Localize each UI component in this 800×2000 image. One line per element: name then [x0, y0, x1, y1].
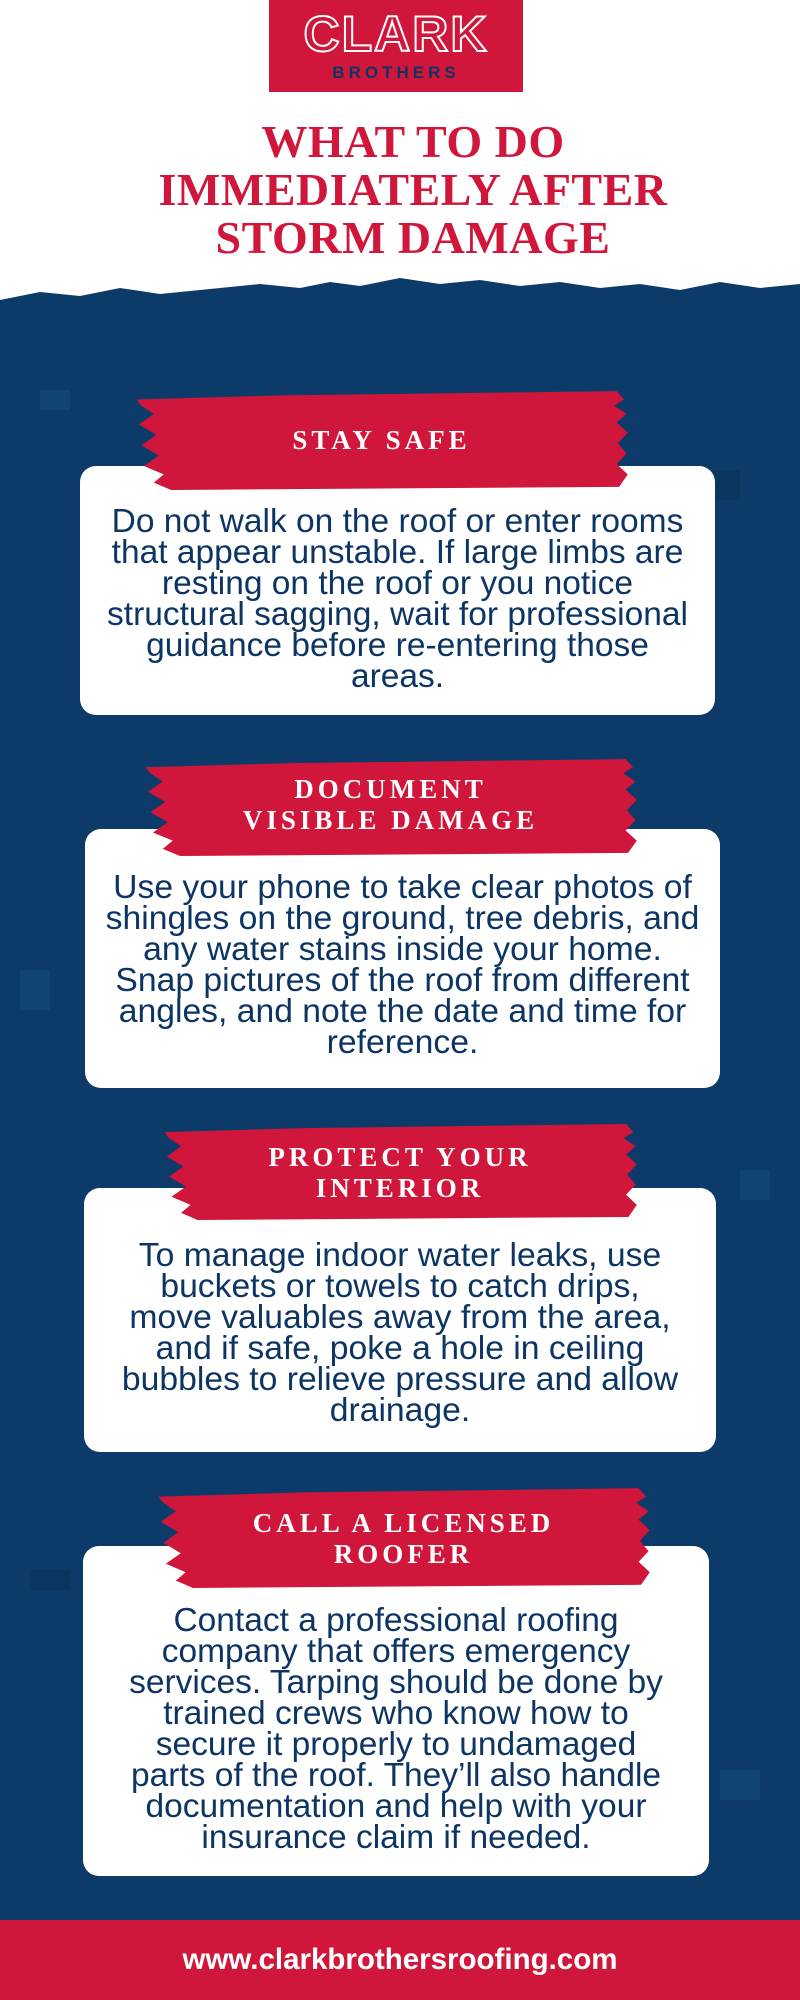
- banner heading: PROTECT YOUR: [268, 1142, 532, 1172]
- text block: move valuables away from the area,: [129, 1298, 671, 1336]
- text block: [129, 1602, 663, 1856]
- text block: shingles on the ground, tree debris, and: [106, 899, 699, 937]
- text block: angles, and note the date and time for: [119, 992, 686, 1030]
- text block: buckets or towels to catch drips,: [160, 1267, 640, 1305]
- banner heading: CALL A LICENSED: [253, 1508, 554, 1538]
- panel: protect your interior: [84, 1124, 716, 1452]
- panel: call a licensed roofer: [83, 1488, 709, 1876]
- banner heading: INTERIOR: [316, 1173, 484, 1203]
- text block: Contact a professional roofing: [173, 1602, 619, 1639]
- banner heading: ROOFER: [334, 1539, 473, 1569]
- logo: BROTHERS: [332, 63, 460, 82]
- panel: document visible damage: [85, 759, 720, 1088]
- text block: areas.: [351, 658, 444, 695]
- text block: [106, 868, 699, 1061]
- text block: Use your phone to take clear photos of: [113, 868, 692, 906]
- panel: stay safe: [80, 391, 715, 715]
- text block: services. Tarping should be done by: [129, 1664, 663, 1701]
- text block: parts of the roof. They’ll also handle: [131, 1757, 661, 1794]
- title: [158, 116, 668, 263]
- title: WHAT TO DO: [261, 116, 565, 167]
- card body: [80, 466, 715, 715]
- text block: documentation and help with your: [146, 1788, 646, 1825]
- footer: [0, 1920, 800, 2000]
- title: IMMEDIATELY AFTER: [158, 164, 668, 215]
- text block: Do not walk on the roof or enter rooms: [112, 503, 683, 540]
- logo: [269, 0, 523, 92]
- text block: secure it properly to undamaged: [156, 1726, 636, 1763]
- text block: company that offers emergency: [162, 1633, 630, 1670]
- text block: and if safe, poke a hole in ceiling: [156, 1329, 644, 1367]
- text block: [122, 1236, 678, 1429]
- text block: that appear unstable. If large limbs are: [112, 534, 683, 571]
- banner heading: [146, 759, 637, 856]
- text block: drainage.: [330, 1391, 470, 1429]
- text block: structural sagging, wait for professional: [107, 596, 688, 633]
- banner heading: VISIBLE DAMAGE: [243, 805, 538, 835]
- text block: trained crews who know how to: [163, 1695, 629, 1732]
- banner heading: [158, 1488, 650, 1588]
- banner heading: DOCUMENT: [294, 774, 487, 804]
- title: STORM DAMAGE: [216, 212, 610, 263]
- text block: any water stains inside your home.: [143, 930, 662, 968]
- text block: Snap pictures of the roof from different: [115, 961, 690, 999]
- logo: CLARK: [304, 6, 488, 62]
- card body: [83, 1546, 709, 1876]
- text block: reference.: [327, 1023, 478, 1061]
- text block: [107, 503, 688, 695]
- card body: [85, 829, 720, 1088]
- footer url: www.clarkbrothersroofing.com: [183, 1943, 617, 1976]
- text block: resting on the roof or you notice: [162, 565, 633, 602]
- banner heading: STAY SAFE: [292, 425, 471, 455]
- text block: bubbles to relieve pressure and allow: [122, 1360, 678, 1398]
- text block: guidance before re-entering those: [146, 627, 649, 664]
- card body: [84, 1188, 716, 1452]
- banner heading: [136, 391, 628, 490]
- text block: To manage indoor water leaks, use: [139, 1236, 661, 1274]
- banner heading: [164, 1124, 637, 1220]
- text block: insurance claim if needed.: [201, 1819, 591, 1856]
